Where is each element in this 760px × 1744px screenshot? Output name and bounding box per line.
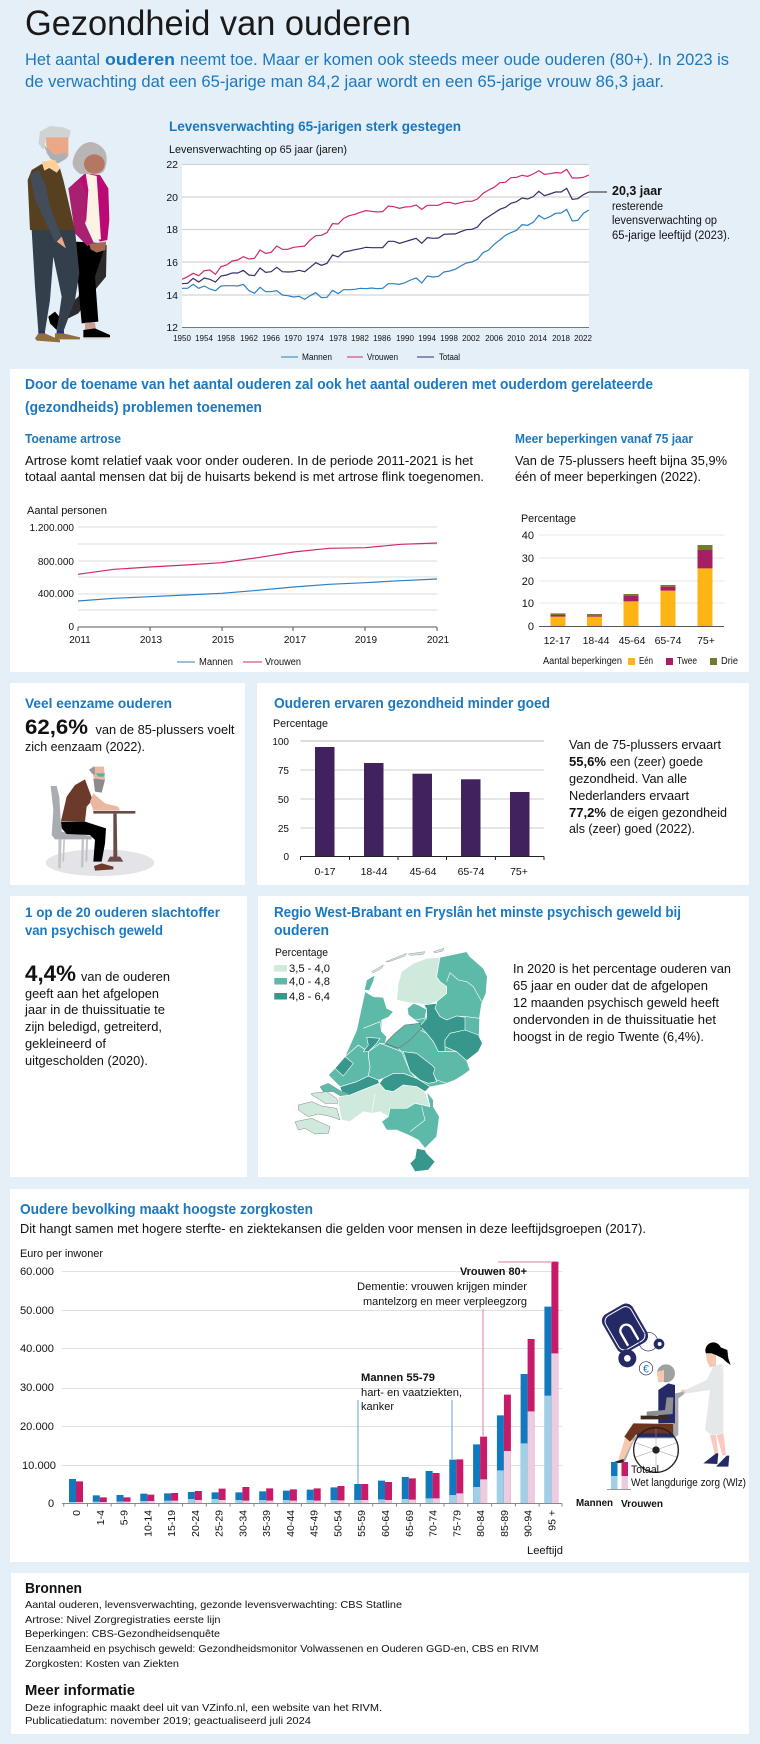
- callout: vrouwen 80+: Vrouwen 80+: [460, 1266, 527, 1278]
- bar chart: euro per inwoner: 60-64: [380, 1510, 392, 1537]
- line chart: levensverwachting op 65 jaar: 1986: [373, 334, 391, 343]
- bar chart: euro per inwoner: 35-39: [261, 1510, 273, 1537]
- bar chart: euro per inwoner: 50.000: [20, 1305, 54, 1317]
- bar chart: euro per inwoner: 55-59: [356, 1510, 368, 1537]
- line chart: artrose: 2017: [284, 635, 307, 646]
- bar chart: ervaren gezondheid: 100: [272, 737, 289, 748]
- bar chart: ervaren gezondheid: Percentage: [273, 718, 328, 730]
- panel: veel eenzame ouderen: 62,6%: [25, 716, 88, 739]
- panel: psychisch geweld: 4,4%: [25, 961, 76, 986]
- line chart: levensverwachting op 65 jaar: 16: [166, 257, 178, 269]
- stacked bar chart: beperkingen: 40: [522, 530, 534, 542]
- panel: bronnen: Publicatiedatum: november 2019; geactualiseerd juli 2024: [25, 1715, 311, 1727]
- panel: psychisch geweld: van psychisch geweld: [25, 922, 163, 938]
- line chart: levensverwachting op 65 jaar: 1950: [173, 334, 191, 343]
- panel: bronnen: Eenzaamheid en psychisch geweld: Gezondheidsmonitor Volwassenen en Ouderen GGD-en, CBS en RIVM: [25, 1643, 538, 1655]
- map legend: [274, 947, 330, 1003]
- stacked bar chart: beperkingen: Drie: [721, 656, 738, 667]
- map legend: 4,8 - 6,4: [289, 991, 330, 1003]
- line chart: levensverwachting op 65 jaar: [166, 159, 592, 362]
- panel: bronnen: Beperkingen: CBS-Gezondheidsenquête: [25, 1628, 220, 1640]
- callout: mannen 55-79: [358, 1372, 462, 1484]
- line chart: levensverwachting op 65 jaar: 1990: [396, 334, 414, 343]
- legend: totaal and Wlz: Mannen: [576, 1497, 613, 1509]
- bar chart: ervaren gezondheid: 65-74: [458, 866, 485, 878]
- line chart: levensverwachting op 65 jaar: 1974: [306, 334, 324, 343]
- bar chart: euro per inwoner: 65-69: [404, 1510, 416, 1537]
- stacked bar chart: beperkingen: Aantal beperkingen: [543, 656, 622, 667]
- map: Netherlands regions: [295, 948, 487, 1172]
- text block: meer beperkingen: één of meer beperkingen (2022).: [515, 470, 701, 484]
- chart heading: levensverwachting: Levensverwachting op 65 jaar (jaren): [169, 144, 347, 156]
- panel: bronnen: Zorgkosten: Kosten van Ziekten: [25, 1658, 179, 1670]
- text block: ervaren gezondheid: 77,2%: [569, 806, 606, 820]
- stacked bar chart: beperkingen: Eén: [639, 656, 653, 667]
- panel: bronnen: [11, 1573, 749, 1734]
- icon: man alone at table: [46, 767, 154, 876]
- bar chart: euro per inwoner: 0: [48, 1498, 54, 1510]
- bar chart: euro per inwoner: 15-19: [166, 1510, 178, 1537]
- bar chart: euro per inwoner: 75-79: [451, 1510, 463, 1537]
- heading: Door de toename van het aantal ouderen zal ook het aantal ouderen met ouderdom gerelateerde: [25, 376, 653, 393]
- text block: toename artrose: [25, 431, 484, 484]
- callout: 20,3 jaar: resterende: [612, 201, 663, 213]
- bar chart: euro per inwoner: 95 +: [546, 1510, 558, 1531]
- line chart: artrose: 800.000: [38, 557, 74, 568]
- heading: [20, 1201, 646, 1236]
- panel: psychisch geweld: [10, 896, 247, 1177]
- line chart: levensverwachting op 65 jaar: 2018: [552, 334, 570, 343]
- panel: bronnen: Artrose: Nivel Zorgregistraties eerste lijn: [25, 1614, 221, 1626]
- callout: vrouwen 80+: mantelzorg en meer verpleegzorg: [363, 1296, 527, 1308]
- bar chart: euro per inwoner: 20.000: [20, 1421, 54, 1433]
- stacked bar chart: beperkingen: 75+: [697, 635, 715, 647]
- bar chart: euro per inwoner: 40.000: [20, 1343, 54, 1355]
- stacked bar chart: beperkingen: 18-44: [583, 635, 610, 647]
- bar chart: euro per inwoner: 40-44: [285, 1510, 297, 1537]
- panel: psychisch geweld: geeft aan het afgelopen: [25, 987, 159, 1001]
- line chart: levensverwachting op 65 jaar: 2014: [529, 334, 547, 343]
- stacked bar chart: beperkingen: 65-74: [655, 635, 682, 647]
- icon: wheelchair care and money bag: €: [643, 1363, 649, 1375]
- bar chart: euro per inwoner: Euro per inwoner: [20, 1248, 103, 1260]
- text block: twente: ondervonden in de thuissituatie het: [513, 1013, 717, 1027]
- line chart: levensverwachting op 65 jaar: 1966: [262, 334, 280, 343]
- heading: (gezondheids) problemen toenemen: [25, 399, 262, 416]
- line chart: artrose: 400.000: [38, 589, 74, 600]
- line chart: artrose: 2011: [69, 635, 91, 646]
- bar chart: euro per inwoner: 70-74: [428, 1510, 440, 1537]
- text block: meer beperkingen: [515, 431, 727, 484]
- callout: vrouwen 80+: Dementie: vrouwen krijgen minder: [357, 1281, 527, 1293]
- stacked bar chart: beperkingen: 0: [528, 621, 534, 633]
- bar chart: euro per inwoner: 10-14: [142, 1510, 154, 1537]
- text block: twente: 12 maanden psychisch geweld heeft: [513, 996, 720, 1010]
- callout: mannen 55-79: Mannen 55-79: [361, 1372, 435, 1384]
- line chart: levensverwachting op 65 jaar: 18: [166, 224, 178, 236]
- intro text: de verwachting dat een 65-jarige man 84,2 jaar wordt en een 65-jarige vrouw 86,3 jaar.: [25, 72, 664, 91]
- bar chart: euro per inwoner: 0: [71, 1510, 83, 1516]
- panel: veel eenzame ouderen: zich eenzaam (2022).: [25, 740, 145, 754]
- bar chart: euro per inwoner: 45-49: [309, 1510, 321, 1537]
- stacked bar chart: beperkingen: 30: [522, 553, 534, 565]
- heading: Dit hangt samen met hogere sterfte- en ziektekansen die gelden voor mensen in deze leeftijdsgroepen (2017).: [20, 1222, 646, 1236]
- callout: mannen 55-79: kanker: [361, 1401, 394, 1413]
- bar chart: euro per inwoner: 1-4: [95, 1510, 107, 1525]
- bar chart: euro per inwoner: 50-54: [332, 1510, 344, 1537]
- panel: bronnen: Deze infographic maakt deel uit van VZinfo.nl, een website van het RIVM.: [25, 1702, 382, 1714]
- bar chart: euro per inwoner: 60.000: [20, 1266, 54, 1278]
- text block: twente: hoogst in de regio Twente (6,4%).: [513, 1030, 704, 1044]
- text block: ervaren gezondheid: 55,6%: [569, 755, 606, 769]
- panel: psychisch geweld: jaar in de thuissituatie te: [24, 1003, 165, 1017]
- panel: psychisch geweld: uitgescholden (2020).: [25, 1054, 148, 1068]
- text block: toename artrose: totaal aantal mensen dat bij de huisarts bekend is met artrose flink toegenomen.: [25, 470, 484, 484]
- text block: toename artrose: Toename artrose: [25, 431, 121, 446]
- callout: 20,3 jaar: 20,3 jaar: [612, 183, 662, 198]
- line chart: levensverwachting op 65 jaar: 22: [166, 159, 178, 171]
- text block: twente: [513, 962, 731, 1044]
- title: Gezondheid van ouderen: [25, 4, 411, 43]
- line chart: levensverwachting op 65 jaar: 14: [166, 290, 178, 302]
- bar chart: ervaren gezondheid: [272, 718, 544, 878]
- panel: veel eenzame ouderen: Veel eenzame ouderen: [25, 695, 172, 711]
- stacked bar chart: beperkingen: Twee: [677, 656, 697, 667]
- map legend: Percentage: [275, 947, 328, 959]
- bar chart: euro per inwoner: 30.000: [20, 1382, 54, 1394]
- line chart: artrose: [27, 505, 450, 668]
- bar chart: euro per inwoner: 20-24: [190, 1510, 202, 1537]
- bar chart: euro per inwoner: [20, 1248, 563, 1557]
- bar chart: ervaren gezondheid: 50: [278, 795, 289, 806]
- map legend: 3,5 - 4,0: [289, 963, 330, 975]
- callout: 20,3 jaar: levensverwachting op: [612, 215, 717, 227]
- text block: meer beperkingen: Van de 75-plussers heeft bijna 35,9%: [515, 454, 727, 468]
- panel: gezondheid minder goed: Ouderen ervaren gezondheid minder goed: [274, 695, 550, 712]
- line chart: artrose: 2015: [212, 635, 235, 646]
- icon: elderly couple walking: [28, 126, 110, 342]
- map legend: 4,0 - 4,8: [289, 976, 330, 988]
- line chart: levensverwachting op 65 jaar: 1958: [217, 334, 235, 343]
- bar chart: ervaren gezondheid: 0-17: [314, 866, 336, 878]
- line chart: levensverwachting op 65 jaar: Mannen: [302, 352, 332, 362]
- text block: ervaren gezondheid: als (zeer) goed (2022).: [569, 822, 695, 836]
- intro text: [25, 50, 729, 91]
- panel: regio psychisch geweld: [258, 896, 749, 1177]
- bar chart: ervaren gezondheid: 0: [283, 852, 289, 863]
- bar chart: ervaren gezondheid: 45-64: [410, 866, 437, 878]
- line chart: levensverwachting op 65 jaar: 1978: [329, 334, 347, 343]
- panel: bronnen: Bronnen: [25, 1580, 82, 1597]
- line chart: artrose: 2013: [140, 635, 163, 646]
- panel: bronnen: Meer informatie: [25, 1682, 135, 1699]
- line chart: artrose: 2021: [427, 635, 450, 646]
- intro text: ouderen: [105, 50, 175, 69]
- panel: regio psychisch geweld: Regio West-Brabant en Fryslân het minste psychisch geweld bij: [274, 904, 681, 921]
- line chart: artrose: 0: [68, 622, 74, 633]
- line chart: artrose: 2019: [355, 635, 378, 646]
- line chart: levensverwachting op 65 jaar: Vrouwen: [367, 352, 398, 362]
- callout: 20,3 jaar: [589, 183, 730, 242]
- stacked bar chart: beperkingen: Percentage: [521, 513, 576, 525]
- legend: totaal and Wlz: Totaal: [631, 1464, 659, 1476]
- line chart: levensverwachting op 65 jaar: 1962: [240, 334, 258, 343]
- chart heading: levensverwachting: Levensverwachting 65-jarigen sterk gestegen: [169, 118, 461, 134]
- stacked bar chart: beperkingen: 10: [522, 598, 534, 610]
- line chart: levensverwachting op 65 jaar: 12: [166, 322, 178, 334]
- line chart: artrose: Vrouwen: [265, 657, 301, 668]
- chart heading: levensverwachting: [169, 118, 461, 156]
- line chart: levensverwachting op 65 jaar: 2022: [574, 334, 592, 343]
- text block: ervaren gezondheid: een (zeer) goede: [610, 755, 703, 769]
- line chart: levensverwachting op 65 jaar: 1970: [284, 334, 302, 343]
- line chart: levensverwachting op 65 jaar: Totaal: [439, 352, 460, 362]
- intro text: Het aantal: [25, 50, 100, 69]
- text block: ervaren gezondheid: de eigen gezondheid: [610, 806, 727, 820]
- panel: gezondheid minder goed: [257, 683, 749, 885]
- line chart: levensverwachting op 65 jaar: 1998: [440, 334, 458, 343]
- bar chart: euro per inwoner: 30-34: [237, 1510, 249, 1537]
- text block: ervaren gezondheid: Nederlanders ervaart: [569, 789, 690, 803]
- intro text: neemt toe. Maar er komen ook steeds meer oude ouderen (80+). In 2023 is: [180, 50, 729, 69]
- line chart: levensverwachting op 65 jaar: 20: [166, 192, 178, 204]
- stacked bar chart: beperkingen: [521, 513, 738, 667]
- line chart: artrose: Mannen: [199, 657, 233, 668]
- callout: 20,3 jaar: 65-jarige leeftijd (2023).: [612, 230, 730, 242]
- legend: totaal and Wlz: Vrouwen: [621, 1498, 663, 1510]
- line chart: artrose: 1.200.000: [30, 523, 74, 534]
- bar chart: euro per inwoner: 10.000: [22, 1460, 56, 1472]
- panel: psychisch geweld: zijn beledigd, getreiterd,: [25, 1020, 162, 1034]
- legend: totaal and Wlz: [576, 1462, 746, 1510]
- line chart: levensverwachting op 65 jaar: 1982: [351, 334, 369, 343]
- stacked bar chart: beperkingen: 20: [522, 576, 534, 588]
- bar chart: euro per inwoner: 25-29: [214, 1510, 226, 1537]
- bar chart: ervaren gezondheid: 25: [278, 824, 289, 835]
- panel: veel eenzame ouderen: [10, 683, 245, 885]
- text block: twente: 65 jaar en ouder dat de afgelopen: [513, 979, 708, 993]
- panel: psychisch geweld: gekleineerd of: [25, 1037, 107, 1051]
- panel: veel eenzame ouderen: van de 85-plussers voelt: [96, 723, 235, 737]
- line chart: artrose: Aantal personen: [27, 505, 107, 517]
- line chart: levensverwachting op 65 jaar: 2002: [462, 334, 480, 343]
- panel: psychisch geweld: van de ouderen: [81, 970, 170, 984]
- panel: zorgkosten: [10, 1189, 749, 1562]
- text block: ervaren gezondheid: gezondheid. Van alle: [569, 772, 687, 786]
- panel: psychisch geweld: 1 op de 20 ouderen slachtoffer: [25, 904, 221, 920]
- line chart: levensverwachting op 65 jaar: 1994: [418, 334, 436, 343]
- callout: vrouwen 80+: [357, 1262, 552, 1437]
- stacked bar chart: beperkingen: 12-17: [544, 635, 571, 647]
- panel: bronnen: Aantal ouderen, levensverwachting, gezonde levensverwachting: CBS Statline: [25, 1599, 402, 1611]
- legend: totaal and Wlz: Wet langdurige zorg (Wlz): [631, 1477, 746, 1489]
- line chart: levensverwachting op 65 jaar: 2006: [485, 334, 503, 343]
- text block: ervaren gezondheid: [569, 738, 727, 836]
- bar chart: ervaren gezondheid: 18-44: [361, 866, 388, 878]
- panel: regio psychisch geweld: ouderen: [274, 922, 329, 939]
- bar chart: euro per inwoner: Leeftijd: [527, 1545, 563, 1557]
- text block: toename artrose: Artrose komt relatief vaak voor onder ouderen. In de periode 2011-2021 is het: [25, 454, 474, 468]
- line chart: levensverwachting op 65 jaar: 2010: [507, 334, 525, 343]
- bar chart: euro per inwoner: 90-94: [523, 1510, 535, 1537]
- heading: [25, 376, 653, 416]
- icon: wheelchair care and money bag: [599, 1301, 731, 1473]
- bar chart: euro per inwoner: 85-89: [499, 1510, 511, 1537]
- text block: meer beperkingen: Meer beperkingen vanaf 75 jaar: [515, 431, 693, 446]
- heading: Oudere bevolking maakt hoogste zorgkosten: [20, 1201, 313, 1218]
- bar chart: ervaren gezondheid: 75+: [510, 866, 528, 878]
- panel: ouderdom gerelateerde problemen: [10, 369, 749, 672]
- bar chart: ervaren gezondheid: 75: [278, 766, 289, 777]
- bar chart: euro per inwoner: 5-9: [118, 1510, 130, 1525]
- bar chart: euro per inwoner: 80-84: [475, 1510, 487, 1537]
- text block: twente: In 2020 is het percentage ouderen van: [513, 962, 731, 976]
- line chart: levensverwachting op 65 jaar: 1954: [195, 334, 213, 343]
- text block: ervaren gezondheid: Van de 75-plussers ervaart: [569, 738, 722, 752]
- callout: mannen 55-79: hart- en vaatziekten,: [361, 1387, 462, 1399]
- stacked bar chart: beperkingen: 45-64: [619, 635, 646, 647]
